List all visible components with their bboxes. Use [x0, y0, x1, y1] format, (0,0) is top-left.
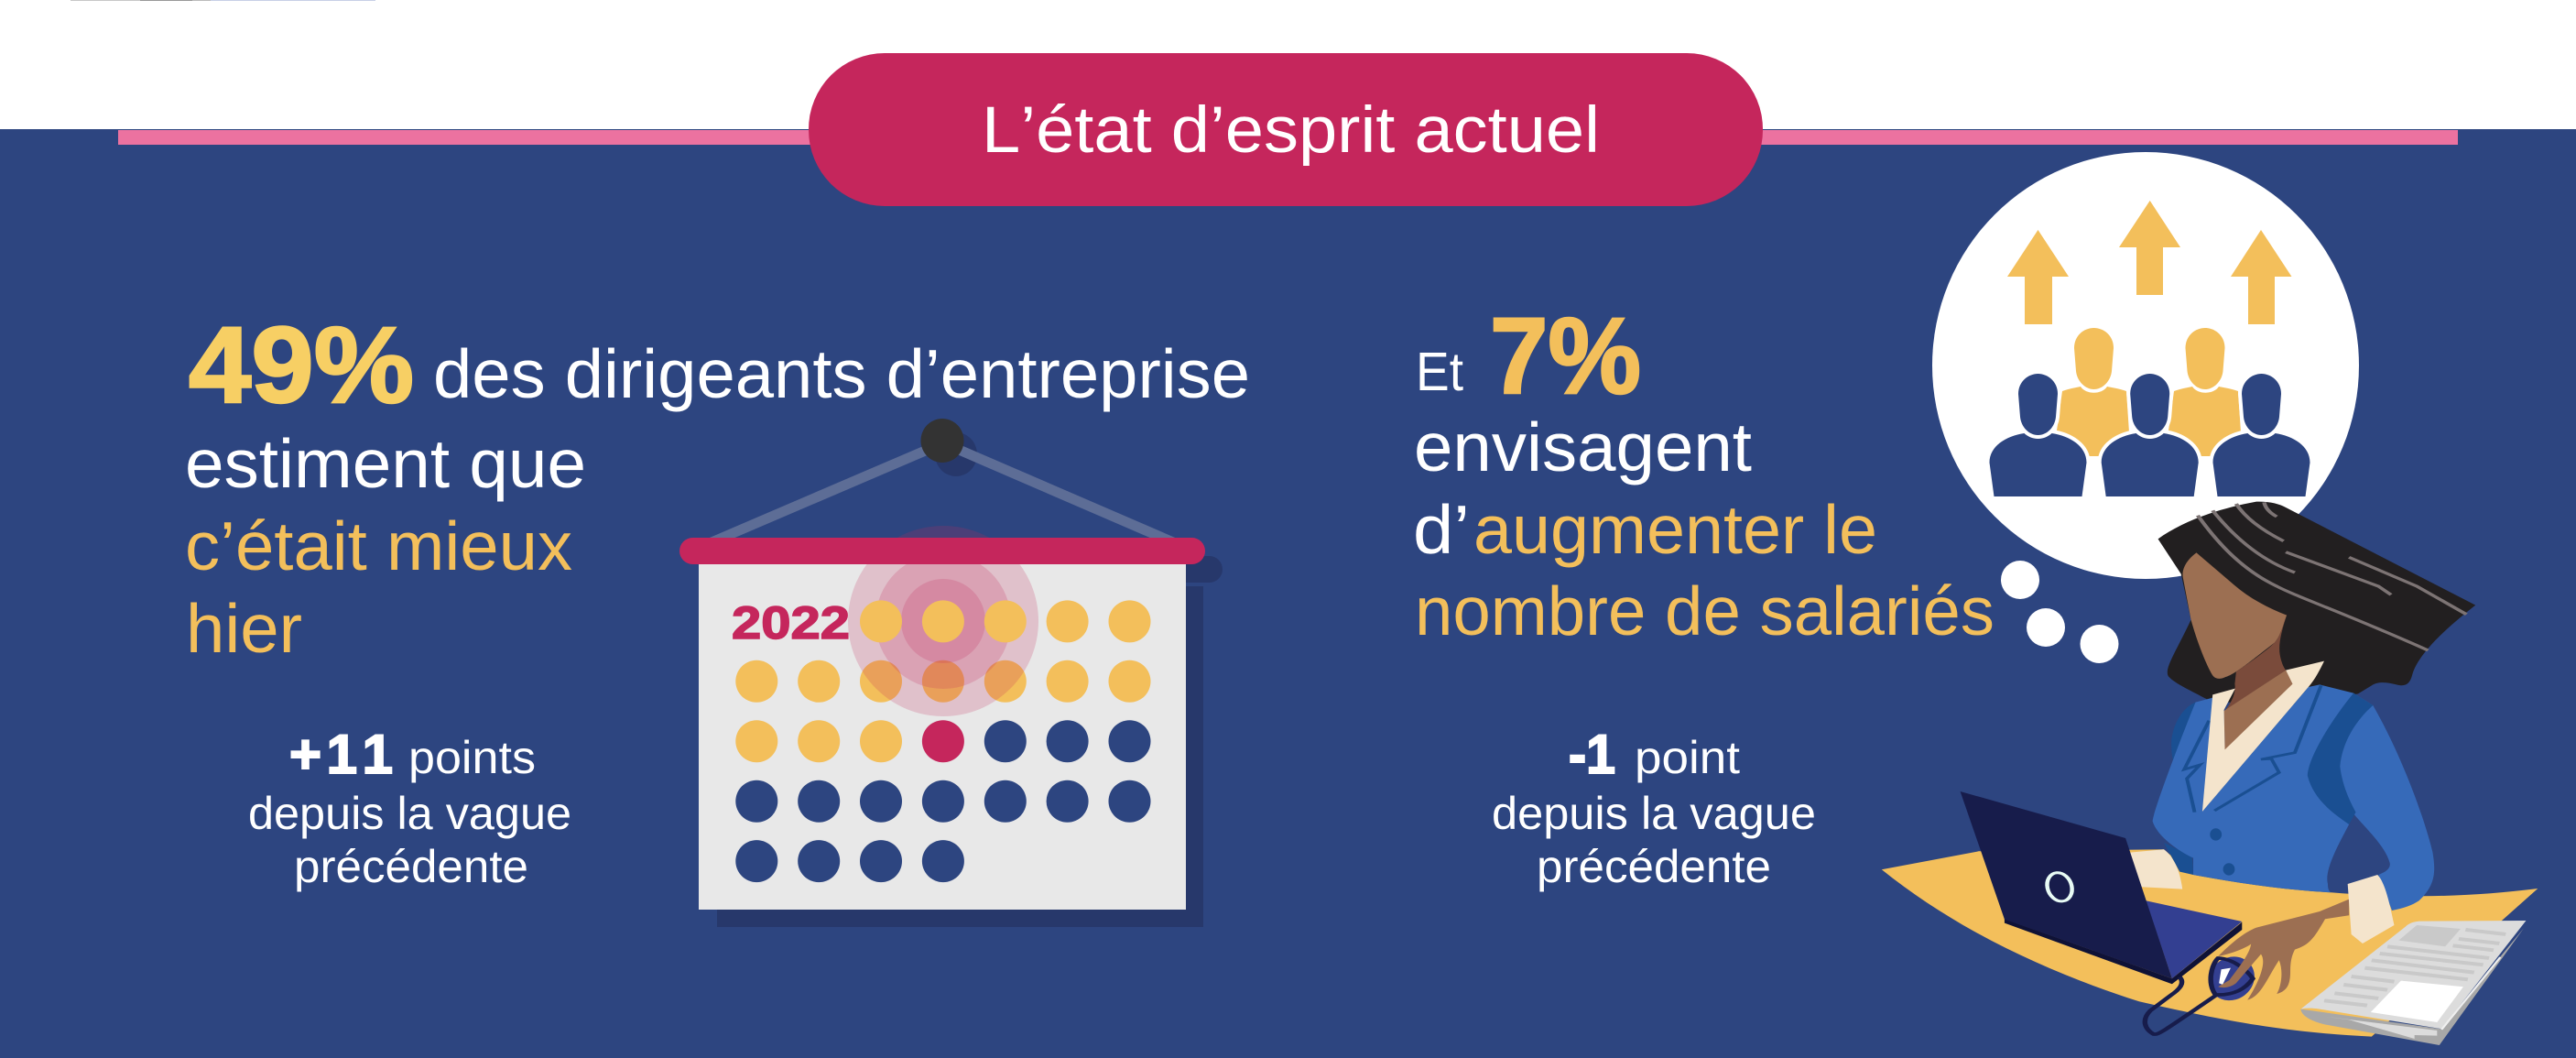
highlighted statement: hier: [186, 590, 302, 667]
computer mouse: [2205, 954, 2258, 1002]
left change note: +11 points: +11: [289, 724, 393, 785]
statement line 3 start: d’: [1413, 491, 1470, 568]
rows 4 and 5 dots: [735, 780, 1150, 882]
highlighted statement: [185, 507, 572, 667]
hanging strings: [705, 449, 1179, 545]
left statistic: 49%: [185, 305, 1250, 667]
row 3 dots: [735, 720, 1150, 762]
heading text: L’état d’esprit actuel: [982, 94, 1600, 167]
right change note: -1 point: [1492, 724, 1816, 892]
highlighted statement: augmenter le: [1473, 491, 1877, 568]
calendar top bar: [679, 538, 1205, 564]
highlighted statement: [1415, 491, 1994, 649]
right statistic: 7%: [1413, 296, 1994, 649]
desk: [1882, 849, 2538, 1037]
right change note: -1 point: précédente: [1537, 841, 1771, 892]
left change note: +11 points: depuis la vague: [248, 788, 571, 839]
left change note: +11 points: [248, 724, 571, 892]
hair: [2158, 502, 2475, 708]
left change note: +11 points: précédente: [294, 841, 528, 892]
big number 49%: 49%: [189, 305, 414, 426]
statement line 2: envisagent: [1414, 409, 1752, 485]
heading pill: [809, 53, 1763, 206]
illustration: woman at desk with laptop and newspaper: [1882, 502, 2538, 1045]
row 2 dots: [735, 660, 1150, 703]
statement line 2: estiment que: [185, 425, 586, 502]
pin: [921, 419, 963, 463]
icon: back row people: [2057, 328, 2241, 456]
thought bubble: [1932, 152, 2359, 663]
icon: front row people: [1989, 374, 2310, 496]
left cuff: [2130, 849, 2182, 889]
mouse cable: [2145, 958, 2253, 1034]
face and neck: [2182, 552, 2294, 750]
highlight rings: [848, 526, 1038, 716]
jacket: [2153, 684, 2434, 911]
laptop: [1961, 791, 2242, 984]
left change note: +11 points: points: [408, 732, 536, 783]
calendar shadow: [717, 432, 1223, 927]
right change note: -1 point: point: [1635, 732, 1740, 783]
right cuff: [2348, 875, 2394, 943]
highlighted statement: c’était mieux: [185, 507, 572, 584]
year label: 2022: [732, 597, 850, 649]
calendar page: [699, 564, 1186, 910]
icon: wall calendar 2022: [679, 419, 1223, 927]
row 1 dots: [860, 600, 1150, 642]
statement line 1: des dirigeants d’entreprise: [433, 335, 1250, 412]
icon: upward arrows: [2007, 201, 2291, 324]
right change note: -1 point: depuis la vague: [1492, 788, 1816, 839]
highlighted statement: nombre de salariés: [1415, 573, 1994, 649]
collar: [2202, 661, 2324, 812]
newspaper: [2300, 921, 2526, 1045]
lead word: Et: [1416, 342, 1463, 402]
header rule: [118, 130, 2458, 145]
hand: [2218, 900, 2349, 1000]
big number 7%: 7%: [1490, 296, 1641, 417]
right change note: -1 point: -1: [1569, 724, 1615, 785]
